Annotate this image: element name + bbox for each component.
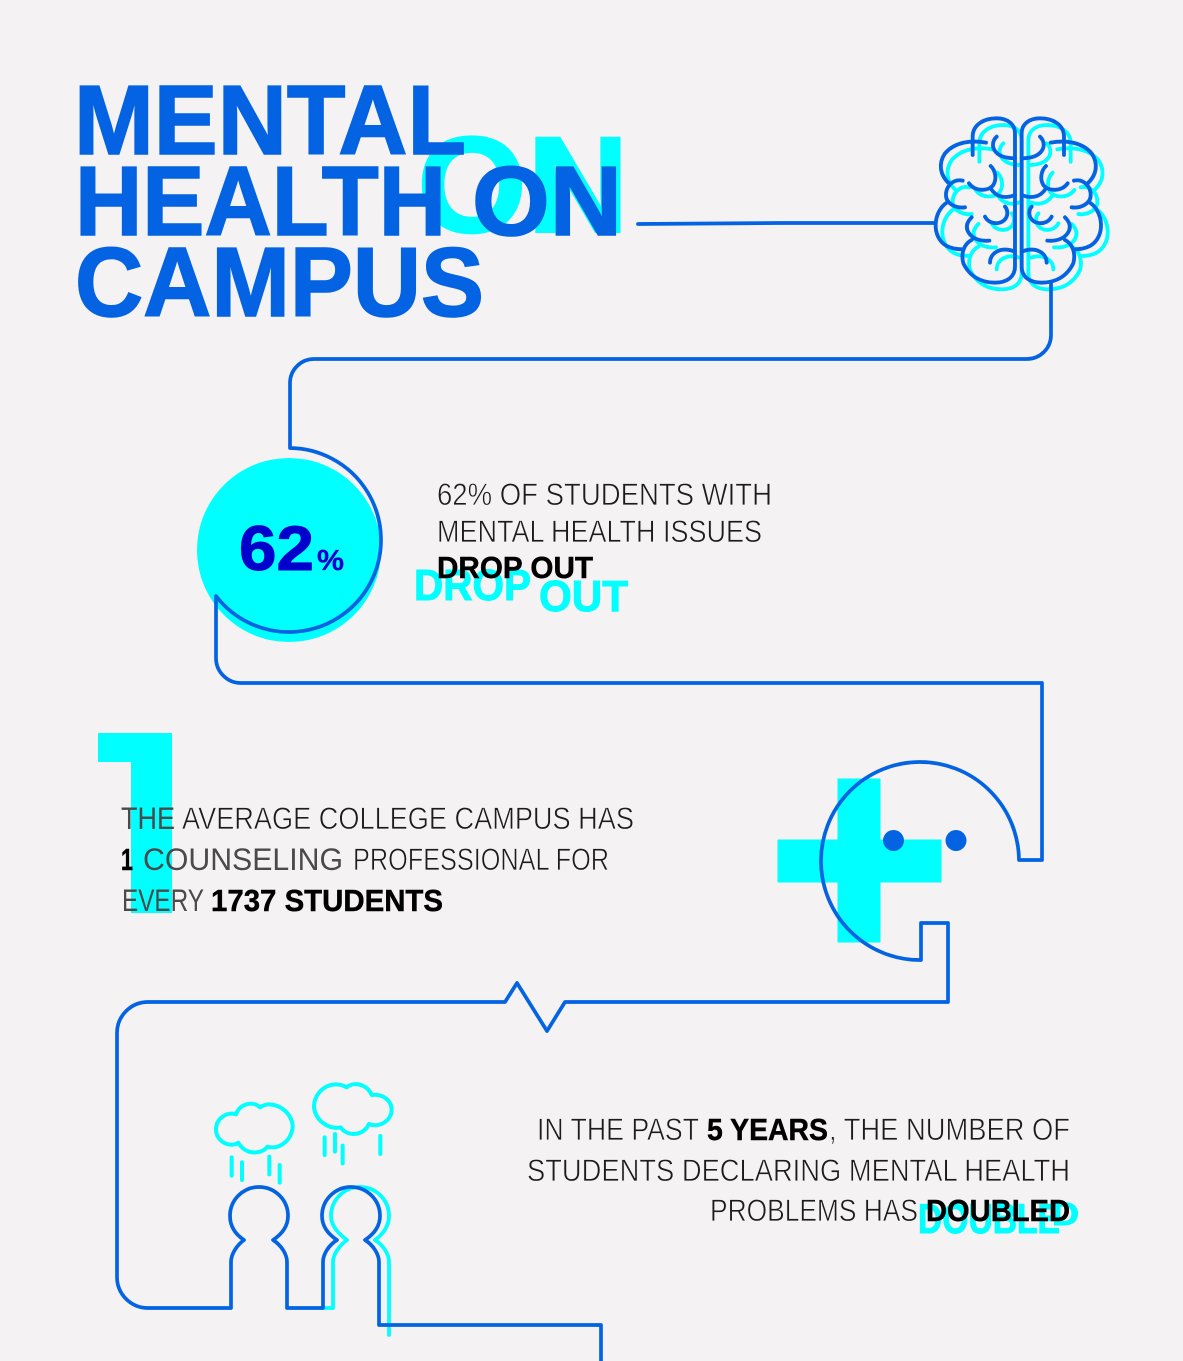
brain outline [936,118,1101,283]
title: ON [472,146,622,256]
icon: rain clouds [216,1084,392,1183]
title: cyan echo word ON: ON [417,109,629,262]
brain cyan shadow [942,125,1108,289]
main connector line with person outlines [117,283,1051,1361]
text block: doubled statistic: PROBLEMS HAS [710,1192,918,1228]
icon: smiley eyes [883,830,966,851]
stat: 62 percent: % [317,545,344,577]
icon: person cyan shadow [323,1187,389,1335]
stat: 62 percent: 62 [239,514,314,584]
cyan echo: DROP OUT: DROP [414,561,531,610]
cyan echo: DROP OUT: OUT [539,572,628,621]
text block: doubled statistic [527,1111,1070,1228]
62 percent cyan disc [197,458,381,642]
title: MENTAL [74,65,466,175]
cyan echo: DROP OUT [414,561,628,621]
text block: doubled statistic: , THE NUMBER OF [829,1111,1070,1147]
text block: counseling statistic: 1737 STUDENTS [211,883,443,918]
text block: counseling statistic: PROFESSIONAL FOR [353,841,609,877]
connector: title to brain [638,223,934,224]
cyan echo: DOUBLED: DOUBLE [918,1195,1060,1242]
text block: counseling statistic: THE [121,800,175,836]
icon: medical cross [778,779,941,942]
text block: counseling statistic [121,800,634,918]
icon: brain [936,118,1108,289]
text block: counseling statistic: AVERAGE COLLEGE CAMPUS HAS [182,800,634,836]
text block: doubled statistic: DOUBLED [926,1193,1070,1228]
text block: counseling statistic: 1 [121,842,133,877]
title [74,65,622,337]
cyan numeral 1: 1 [80,679,225,969]
title: HEALTH [75,146,446,256]
text block: counseling statistic: COUNSELING [143,841,343,877]
text block: counseling statistic: EVERY [122,882,204,918]
title: CAMPUS [75,227,484,337]
stat: 62 percent [239,514,344,584]
text block: doubled statistic: 5 YEARS [707,1112,828,1147]
cyan numeral 1 [98,733,172,913]
text block: doubled statistic: STUDENTS DECLARING MENTAL HEALTH [527,1152,1070,1188]
text block: dropout statistic: MENTAL HEALTH ISSUES [437,513,762,549]
text block: doubled statistic: IN THE PAST [537,1111,699,1147]
text block: dropout statistic: DROP OUT [437,550,593,585]
text block: dropout statistic: 62% OF STUDENTS WITH [437,476,772,512]
cyan echo: DOUBLED: D [1052,1196,1079,1232]
text block: dropout statistic [437,476,772,585]
